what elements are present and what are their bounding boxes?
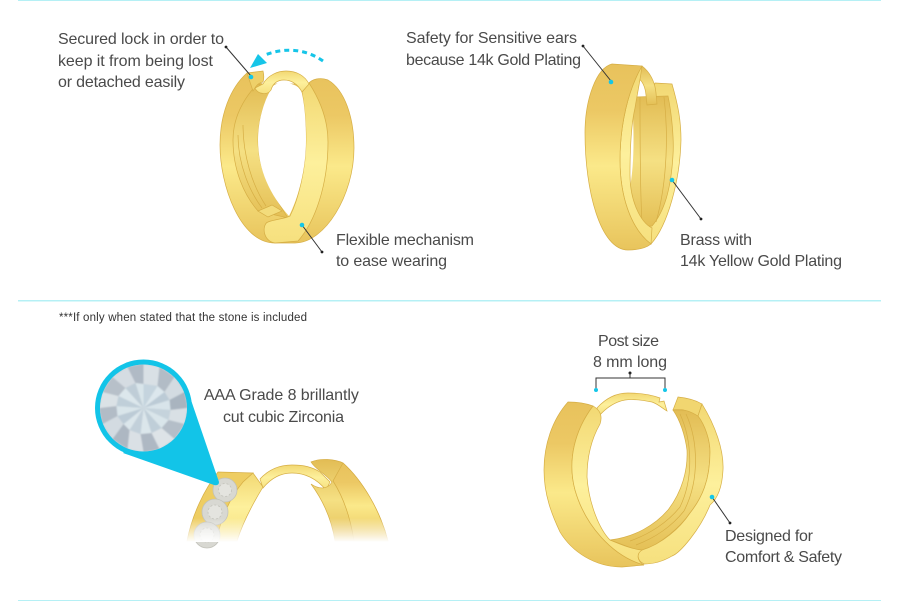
pointer: lock xyxy=(225,46,253,79)
text: stone footnote: ***If only when stated that the stone is included xyxy=(59,312,307,324)
text: zirconia: AAA Grade 8 brillantly xyxy=(204,387,359,404)
text: secured lock: or detached easily xyxy=(58,74,185,91)
pointer: flexible mechanism xyxy=(300,223,323,253)
text: comfort and safety: Comfort & Safety xyxy=(725,549,842,566)
text: secured lock: Secured lock in order to xyxy=(58,31,224,48)
text: comfort and safety: Designed for xyxy=(725,528,814,545)
stones in channel xyxy=(194,478,237,548)
text: secured lock: keep it from being lost xyxy=(58,53,214,70)
earring: open view xyxy=(544,393,723,567)
bracket: post size xyxy=(594,372,667,392)
text: post size: Post size xyxy=(598,333,659,350)
text: flexible mechanism: to ease wearing xyxy=(336,253,447,270)
text: flexible mechanism: Flexible mechanism xyxy=(336,232,474,249)
text: brass: 14k Yellow Gold Plating xyxy=(680,253,842,270)
earring: lock and flexible mechanism view xyxy=(220,71,354,243)
pointer: brass xyxy=(670,178,702,220)
pointer: plating xyxy=(582,45,613,84)
text: sensitive ears: Safety for Sensitive ears xyxy=(406,30,577,47)
text: brass: Brass with xyxy=(680,232,752,249)
earring: stone set, cropped xyxy=(187,459,388,541)
callout: magnified zirconia xyxy=(95,360,219,485)
text: zirconia: cut cubic Zirconia xyxy=(223,409,344,426)
earring: side view xyxy=(585,64,681,250)
arrow: closing direction xyxy=(250,50,323,68)
text: sensitive ears: because 14k Gold Plating xyxy=(406,52,581,69)
text: post size: 8 mm long xyxy=(593,354,667,371)
pointer: comfort xyxy=(710,495,731,524)
